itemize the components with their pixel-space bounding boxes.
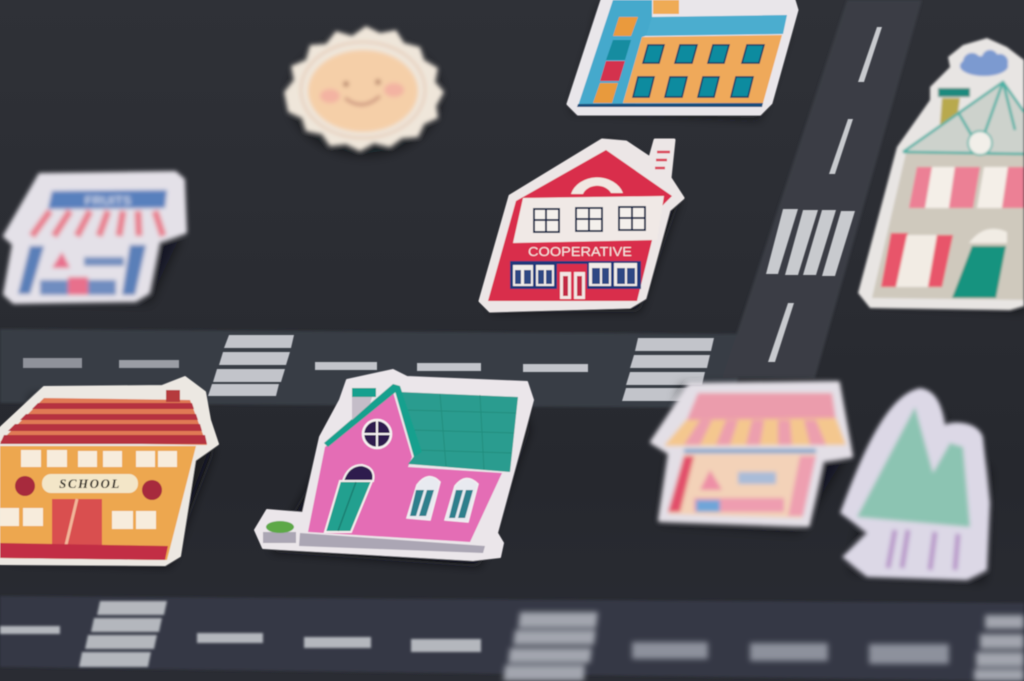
shop windows [510,261,641,289]
middle road markings [23,335,714,401]
sun face [308,50,418,132]
blue line [684,449,816,453]
wall [668,454,816,518]
bottom line [577,103,763,107]
bottom road markings [0,601,481,667]
shop details [52,252,70,268]
cooperative outline [480,140,683,311]
house outline [858,38,1024,310]
roof [0,398,207,445]
teal roof [400,392,518,472]
sticker: tall teal-roof house [858,38,1024,312]
sticker: school: SCHOOL [59,476,121,491]
roof arch [571,177,623,194]
blue side column [578,0,762,106]
orange tab [653,0,679,14]
roof [903,82,1024,154]
base and planter [299,533,485,553]
vertical road markings [766,27,882,362]
sticker: pink house [255,370,533,567]
building outline [568,0,797,114]
road: vertical diagonal [722,0,922,378]
lower windows [881,233,908,287]
red body [488,150,672,301]
chimney [352,397,372,420]
sticker: fruit shop [5,173,185,302]
upper windows [534,207,645,232]
upper windows [909,167,932,208]
awning stripes [32,211,163,236]
sticker: sun [284,26,444,156]
trees outline [840,388,990,580]
side windows [613,17,638,36]
school base [0,543,168,560]
sun outline [284,26,444,151]
orange facade [623,35,782,103]
sticker: top blue and orange building [568,0,797,120]
windows [633,45,764,97]
school windows [0,450,177,529]
teal door [343,465,374,481]
awning stripes [664,418,846,446]
tree foliage [857,407,970,527]
school wall [0,446,196,560]
sticker: cooperative [480,140,683,312]
school door [52,499,102,545]
chimney [940,98,960,125]
teal door [952,246,1006,298]
sticker: green trees [840,388,990,582]
upper band [513,196,664,243]
sticker: pink market shop [652,383,851,532]
school outline [0,377,218,565]
round window [363,420,391,448]
shop sign: FRUITS [85,193,132,208]
market outline [652,383,851,525]
blue roof band [48,190,167,209]
awning top [686,393,836,422]
trunks [888,530,958,570]
arched windows [407,477,440,520]
sticker: school [0,377,218,567]
road: bottom horizontal [0,596,1024,681]
school sign [42,474,138,493]
blue band [646,15,787,36]
wall [872,153,1024,300]
blue side strips [18,246,44,294]
cooperative label: COOPERATIVE [528,245,632,259]
road: middle horizontal [0,329,750,408]
pink house outline [255,370,533,560]
pink walls [308,392,502,542]
cloud [960,50,1008,76]
chimney stripes [655,152,670,168]
sun scalloped dots [301,42,425,138]
shop outline [5,173,185,302]
